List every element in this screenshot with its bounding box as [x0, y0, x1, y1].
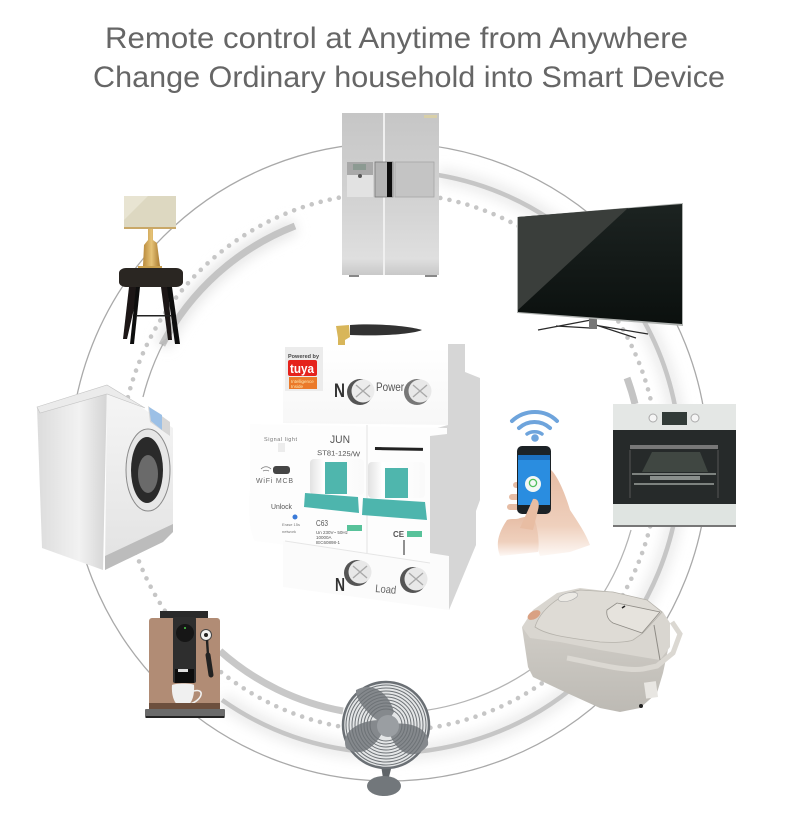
icon: phone in hand with wifi [498, 412, 590, 556]
connection rings [70, 143, 708, 781]
tuya badge [285, 347, 323, 391]
lower labels: network [282, 529, 296, 534]
label: WiFi MCB: WiFi MCB [256, 478, 293, 485]
lower labels: IEC60898-1 [316, 540, 341, 545]
lower labels: Unlock [271, 502, 292, 511]
lower labels: C63 [316, 519, 328, 528]
side rail [430, 344, 480, 610]
label: N bottom: N [335, 575, 345, 595]
icon: rice cooker [522, 588, 680, 712]
left toggle [304, 459, 364, 513]
tuya badge: Inside [291, 384, 304, 389]
lower labels [271, 502, 422, 555]
icon: desk fan [343, 682, 429, 796]
logo and model [317, 434, 361, 459]
icon: refrigerator [342, 113, 439, 277]
hands [528, 470, 590, 556]
logo and model: ST81-125/W [317, 450, 361, 459]
tuya badge: Intelligence [291, 379, 314, 384]
logo and model: JUN [330, 434, 350, 446]
title [93, 22, 725, 94]
screw: Power [404, 379, 432, 405]
icon: washing machine [37, 385, 173, 570]
phone [517, 446, 551, 514]
antenna [336, 324, 422, 345]
pointing finger [520, 499, 539, 530]
lower labels: 10000A [316, 535, 332, 540]
icon: coffee machine [145, 611, 225, 718]
label: Power: Power [376, 382, 404, 394]
icon: television [517, 203, 683, 338]
wifi signal [512, 412, 557, 442]
icon: oven [613, 404, 736, 527]
upper housing [283, 346, 448, 425]
title: Change Ordinary household into Smart Device [93, 61, 725, 94]
label: Load: Load [375, 583, 397, 597]
lower housing [283, 541, 449, 610]
tuya badge: Powered by [288, 354, 320, 360]
lower labels: Un 230V~ 50Hz [316, 530, 349, 535]
label: N: N [334, 381, 345, 402]
lower labels: CE [393, 530, 405, 539]
product: smart circuit breaker [249, 324, 480, 610]
title: Remote control at Anytime from Anywhere [105, 22, 688, 55]
curled fingers [510, 485, 520, 507]
icon: lamp on side table [119, 196, 183, 344]
label: WiFi MCB [256, 466, 293, 485]
screw: N top [347, 379, 374, 405]
label: Signal light: Signal light [264, 437, 297, 443]
lower labels: Erase 15s [282, 522, 300, 527]
screw: Load [400, 567, 428, 593]
middle module [249, 424, 447, 563]
right toggle [362, 462, 427, 520]
screw: N bottom [344, 560, 372, 586]
tuya badge: tuya [290, 361, 315, 376]
